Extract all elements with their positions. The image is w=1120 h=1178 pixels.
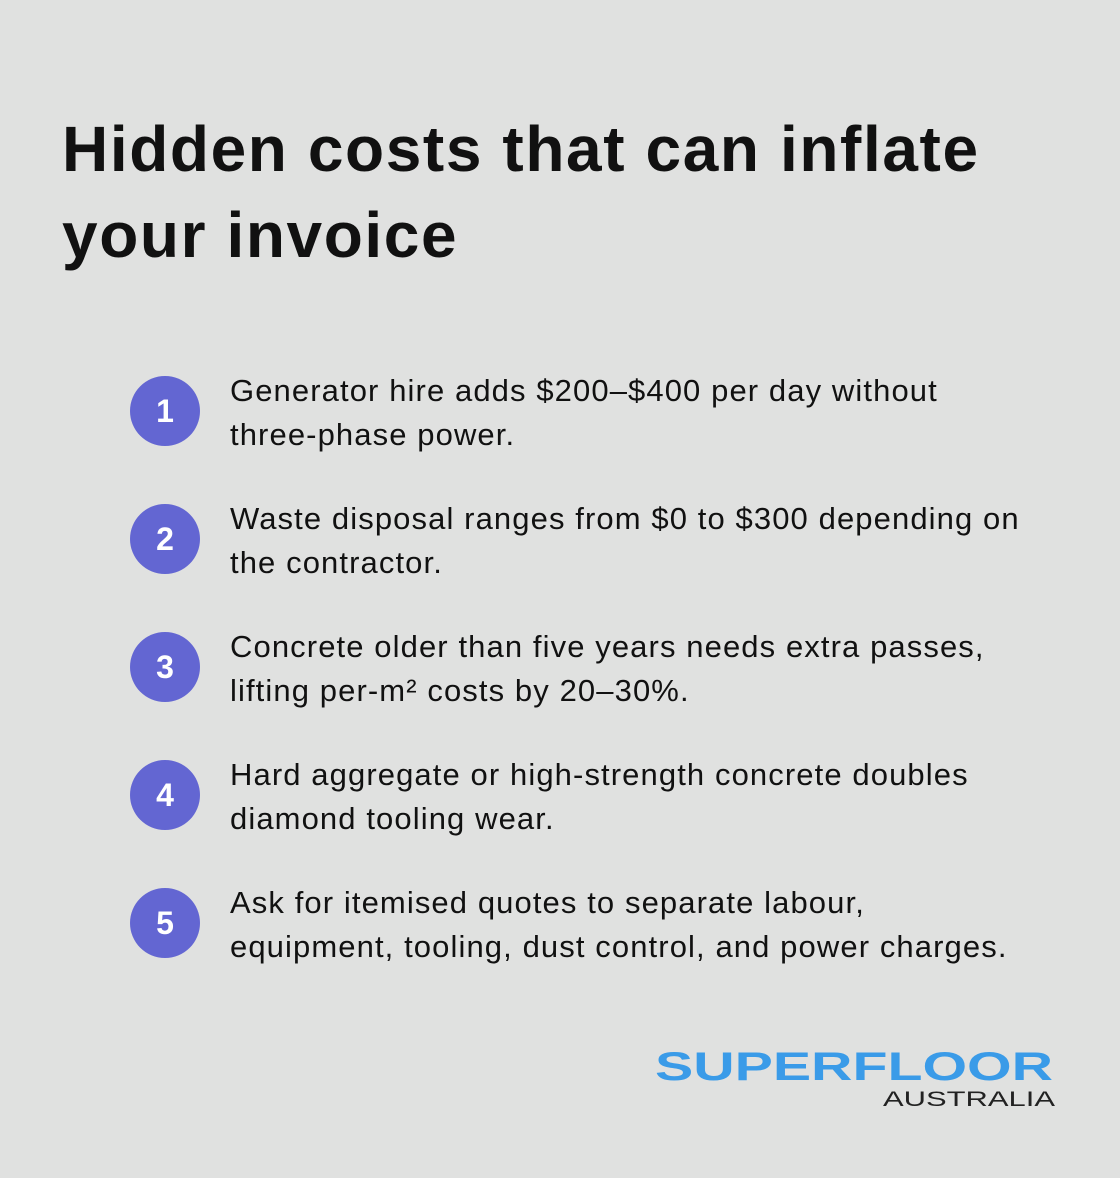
item 1 [130, 373, 938, 452]
title: your invoice [62, 199, 458, 271]
text 4 [230, 757, 969, 836]
item 4 [130, 757, 969, 836]
item 2 [130, 501, 1020, 580]
text 2: Waste disposal ranges from $0 to $300 depending on [230, 501, 1020, 536]
icon: number 2 [130, 504, 200, 574]
icon: number 3: 3 [156, 649, 174, 685]
text 4: diamond tooling wear. [230, 801, 555, 836]
text 1: three-phase power. [230, 417, 515, 452]
icon: number 3 [130, 632, 200, 702]
icon: number 4: 4 [156, 777, 174, 813]
icon: number 1: 1 [156, 393, 174, 429]
text 1 [230, 373, 938, 452]
text 2: the contractor. [230, 545, 443, 580]
title: Hidden costs that can inflate [62, 113, 980, 185]
text 3: Concrete older than five years needs extra passes, [230, 629, 985, 664]
text 5 [230, 885, 1008, 964]
icon: number 5: 5 [156, 905, 174, 941]
item 3 [130, 629, 985, 708]
text 5: equipment, tooling, dust control, and power charges. [230, 929, 1008, 964]
text 1: Generator hire adds $200–$400 per day without [230, 373, 938, 408]
title [62, 113, 980, 271]
icon: number 2: 2 [156, 521, 174, 557]
item 5 [130, 885, 1008, 964]
text 4: Hard aggregate or high-strength concrete doubles [230, 757, 969, 792]
text 3 [230, 629, 985, 708]
icon: number 1 [130, 376, 200, 446]
logo [655, 1048, 1055, 1110]
text 3: lifting per-m² costs by 20–30%. [230, 673, 690, 708]
text 5: Ask for itemised quotes to separate labour, [230, 885, 865, 920]
text 2 [230, 501, 1020, 580]
icon: number 5 [130, 888, 200, 958]
icon: number 4 [130, 760, 200, 830]
